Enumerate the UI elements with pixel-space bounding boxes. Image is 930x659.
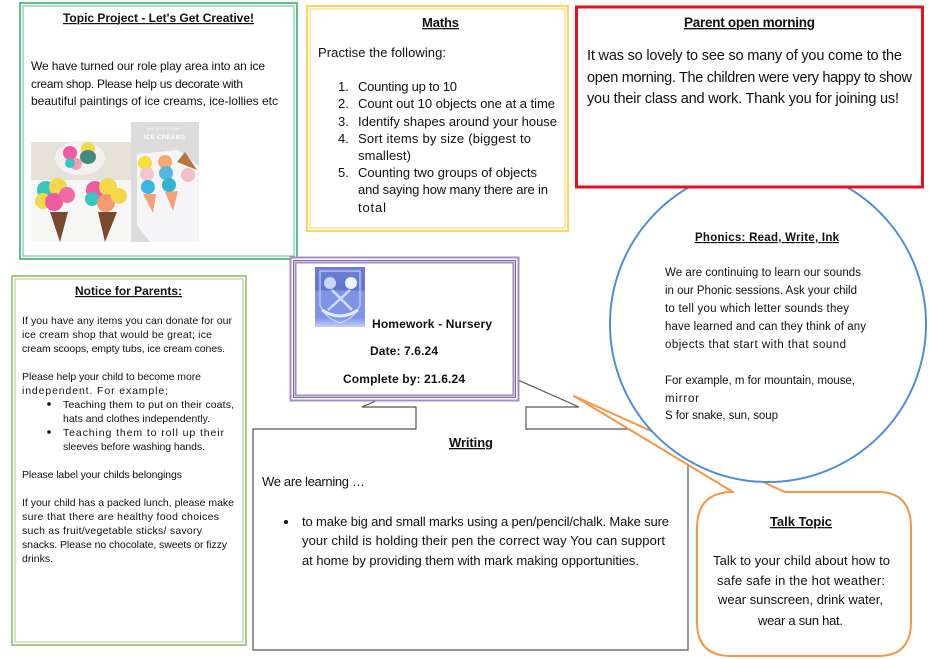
image: painted ice creams (31, 141, 131, 242)
heading: writing: Writing (449, 435, 493, 450)
text: talk topic body: wear a sun hat. (757, 613, 843, 628)
list: maths tasks: 1. (338, 79, 349, 94)
text: date: Date: 7.6.24 (370, 344, 438, 358)
image: potato print ice creams: ICE CREAMS (144, 135, 185, 141)
text: talk topic body: wear sunscreen, drink water, (717, 592, 883, 607)
heading: notice for parents: Notice for Parents: (75, 284, 182, 298)
text: topic project body: cream shop. Please help us decorate with (31, 77, 243, 91)
list: maths tasks: Counting two groups of objects (358, 165, 538, 180)
text: phonics body (665, 267, 866, 422)
heading: parent open morning: Parent open morning (684, 15, 815, 30)
image: potato print ice creams (131, 122, 199, 242)
text: notice body: sure that there are healthy food choices (22, 511, 219, 523)
list: maths tasks: total (358, 200, 386, 215)
icon: school crest (315, 267, 365, 327)
text: writing body: We are learning … (262, 474, 365, 489)
heading: topic project: Topic Project - Let's Get Creative! (63, 11, 254, 25)
text: notice body: ice cream shop that would be great; ice (22, 329, 212, 341)
text: writing body: to make big and small marks using a pen/pencil/chalk. Make sure (302, 514, 669, 529)
text: phonics body: have learned and can they think of any (665, 321, 866, 333)
panel: notice for parents (12, 276, 246, 645)
text: topic project body: We have turned our role play area into an ice (31, 59, 265, 73)
list: maths tasks (338, 79, 557, 215)
text: phonics body: in our Phonic sessions. Ask your child (665, 285, 857, 297)
heading: maths: Maths (422, 15, 459, 30)
text: notice body: Teaching them to roll up their (63, 427, 224, 439)
text: phonics body: objects that start with that sound (665, 339, 846, 351)
list: maths tasks: Counting up to 10 (358, 79, 457, 94)
text: phonics body: mirror (665, 393, 699, 405)
text: phonics body: S for snake, sun, soup (665, 410, 778, 422)
text: notice body: If you have any items you can donate for our (22, 315, 232, 327)
text: parent open morning body: you their class and work. Thank you for joining us! (587, 91, 899, 107)
text: talk topic body (713, 553, 890, 628)
text: notice body: If your child has a packed lunch, please make (22, 497, 234, 509)
text: writing body (262, 474, 669, 568)
text: notice body: sleeves before washing hands. (63, 441, 205, 453)
panel: parent open morning (576, 7, 922, 187)
list: maths tasks: Identify shapes around your house (358, 114, 557, 129)
callout: talk topic (574, 396, 911, 656)
text: phonics body: to tell you which letter sounds they (665, 303, 849, 315)
text: topic project body (31, 59, 278, 108)
text: notice body: Please label your childs belongings (22, 469, 182, 481)
text: complete by: Complete by: 21.6.24 (343, 372, 465, 386)
list: maths tasks: 4. (338, 131, 349, 146)
text: talk topic body: Talk to your child about how to (713, 553, 890, 568)
list: maths tasks: Sort items by size (biggest to (358, 131, 531, 146)
text: writing body: at home by providing them with mark making opportunities. (302, 553, 639, 568)
panel: maths (307, 6, 568, 231)
panel: topic project (20, 3, 297, 259)
list: maths tasks: 3. (338, 114, 349, 129)
text: phonics body: For example, m for mountain, mouse, (665, 375, 855, 387)
list: maths tasks: Count out 10 objects one at a time (358, 96, 555, 111)
text: notice body (22, 315, 234, 565)
panel: homework title (290, 258, 518, 400)
text: maths intro: Practise the following: (318, 45, 446, 60)
list: maths tasks: 5. (338, 165, 349, 180)
text: topic project body: beautiful paintings of ice creams, ice-lollies etc (31, 94, 278, 108)
text: phonics body: We are continuing to learn our sounds (665, 267, 861, 279)
text: notice body: Teaching them to put on their coats, (63, 399, 234, 411)
callout: writing (253, 380, 688, 650)
text: talk topic body: safe safe in the hot weather: (717, 573, 885, 588)
text: parent open morning body: open morning. The children were very happy to show (587, 70, 913, 86)
text: notice body: such as fruit/vegetable sticks/ savory (22, 525, 203, 537)
text: notice body: hats and clothes independently. (63, 413, 210, 425)
text: notice body: drinks. (22, 553, 53, 565)
list: maths tasks: 2. (338, 96, 349, 111)
text: writing body: your child is holding their pen the correct way You can support (302, 533, 665, 548)
list: maths tasks: smallest) (358, 148, 411, 163)
panel: phonics circle (610, 166, 926, 482)
text: parent open morning body (587, 48, 913, 107)
image: potato print ice creams: POTATO PRINT (147, 126, 182, 131)
text: notice body: cream scoops, empty tubs, ice cream cones. (22, 343, 225, 355)
heading: phonics: Phonics: Read, Write, Ink (695, 232, 840, 244)
text: notice body: independent. For example; (22, 385, 168, 397)
text: notice body: Please help your child to become more (22, 371, 201, 383)
text: notice body: snacks. Please no chocolate, sweets or fizzy (22, 539, 228, 551)
text: parent open morning body: It was so lovely to see so many of you come to the (587, 48, 902, 64)
heading: talk topic: Talk Topic (770, 514, 832, 529)
text: homework nursery: Homework - Nursery (372, 317, 492, 331)
list: maths tasks: and saying how many there are in (358, 182, 548, 197)
